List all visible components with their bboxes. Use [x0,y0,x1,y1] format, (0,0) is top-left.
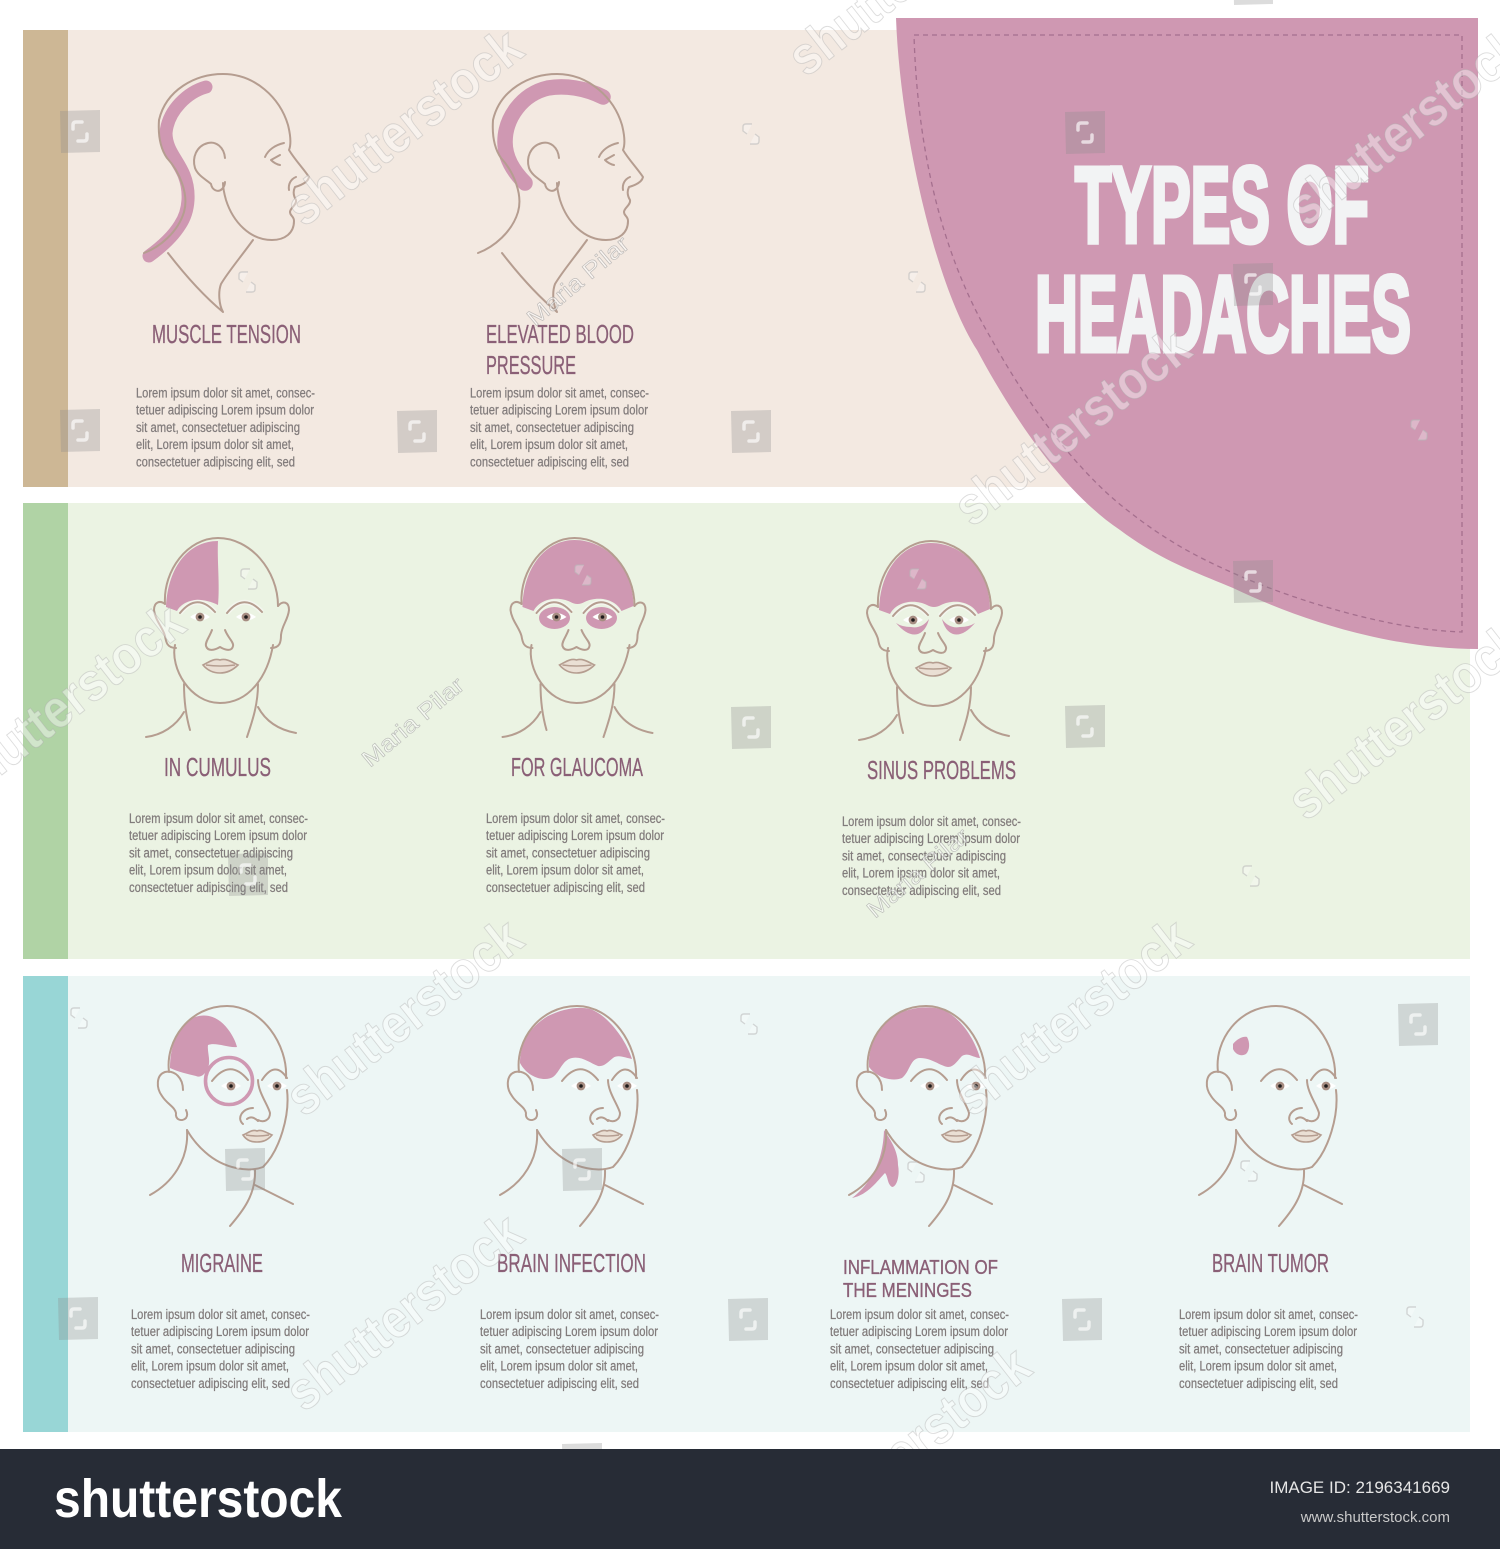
text: inflammation of the meninges description: consectetuer adipiscing elit, sed [830,1376,989,1391]
text: migraine description: tetuer adipiscing Lorem ipsum dolor [131,1324,309,1339]
label: sinus problems: SINUS PROBLEMS [867,755,1016,785]
text: brain infection description: consectetuer adipiscing elit, sed [480,1376,639,1391]
watermark overlay: shutterstock [782,1334,1042,1549]
text: brain infection description: sit amet, consectetuer adipiscing [480,1341,644,1356]
title panel: pink quarter shape with title [896,18,1478,649]
watermark overlay: Maria Pilar [522,230,634,331]
text: brain infection description: elit, Lorem ipsum dolor sit amet, [480,1359,638,1374]
text: sinus problems description: sit amet, consectetuer adipiscing [842,848,1006,863]
text: in cumulus description: sit amet, consectetuer adipiscing [129,845,293,860]
text: migraine description [131,1307,310,1391]
text: for glaucoma description [486,811,665,895]
text: muscle tension description: sit amet, consectetuer adipiscing [136,420,300,435]
image id: IMAGE ID: 2196341669 [1269,1478,1450,1497]
text: elevated blood pressure description: consectetuer adipiscing elit, sed [470,454,629,469]
watermark overlay: shutterstock [942,906,1202,1127]
text: brain tumor description: elit, Lorem ipsum dolor sit amet, [1179,1359,1337,1374]
text: muscle tension description: Lorem ipsum dolor sit amet, consec- [136,386,315,400]
text: brain infection description: Lorem ipsum dolor sit amet, consec- [480,1307,659,1322]
text: elevated blood pressure description: sit amet, consectetuer adipiscing [470,420,634,435]
panel: bottom band (migraine, infection, meninges, tumor) [23,976,1470,1432]
panel: middle band (in cumulus, glaucoma, sinus) [23,503,1470,959]
text: for glaucoma description: elit, Lorem ipsum dolor sit amet, [486,863,644,878]
text: brain tumor description: consectetuer adipiscing elit, sed [1179,1376,1338,1391]
text: brain tumor description [1179,1307,1358,1391]
icon: migraine head [150,1006,293,1226]
label: brain tumor: BRAIN TUMOR [1212,1248,1329,1278]
watermark overlay: shutterstock [274,906,534,1127]
footer bar [0,1449,1500,1549]
text: migraine description: elit, Lorem ipsum dolor sit amet, [131,1359,289,1374]
text: migraine description: consectetuer adipiscing elit, sed [131,1376,290,1391]
text: migraine description: Lorem ipsum dolor sit amet, consec- [131,1307,310,1322]
side strip: teal [23,976,68,1432]
text: sinus problems description: consectetuer adipiscing elit, sed [842,883,1001,898]
panel background: peach [23,30,1470,487]
label: brain infection: BRAIN INFECTION [497,1248,646,1278]
text: for glaucoma description: sit amet, consectetuer adipiscing [486,845,650,860]
text: brain tumor description: tetuer adipiscing Lorem ipsum dolor [1179,1324,1357,1339]
label: elevated blood pressure: PRESSURE [486,350,576,380]
text: elevated blood pressure description: tetuer adipiscing Lorem ipsum dolor [470,403,648,418]
label: elevated blood pressure: ELEVATED BLOOD [486,319,634,349]
text: sinus problems description: tetuer adipiscing Lorem ipsum dolor [842,831,1020,846]
text: muscle tension description: elit, Lorem ipsum dolor sit amet, [136,437,294,452]
footer background [0,1449,1500,1549]
text: for glaucoma description: consectetuer adipiscing elit, sed [486,880,645,895]
icon: inflammation of the meninges head [849,1006,992,1226]
website: www.shutterstock.com [1300,1509,1450,1526]
text: for glaucoma description: Lorem ipsum dolor sit amet, consec- [486,811,665,826]
text: inflammation of the meninges description: tetuer adipiscing Lorem ipsum dolor [830,1324,1008,1339]
icon: sinus head [859,541,1009,740]
side strip: tan [23,30,68,487]
panel: top band (muscle tension, elevated blood pressure) [23,30,1470,487]
text: inflammation of the meninges description: Lorem ipsum dolor sit amet, consec- [830,1307,1009,1322]
text: inflammation of the meninges description: sit amet, consectetuer adipiscing [830,1341,994,1356]
text: inflammation of the meninges description [830,1307,1009,1391]
icon: brain infection head [500,1006,643,1226]
label: inflammation of the meninges [843,1257,998,1302]
icon: muscle tension head [144,74,309,312]
icon: glaucoma head [502,538,652,737]
text: inflammation of the meninges description: elit, Lorem ipsum dolor sit amet, [830,1359,988,1374]
text: sinus problems description [842,814,1021,898]
text: for glaucoma description: tetuer adipiscing Lorem ipsum dolor [486,828,664,843]
text: elevated blood pressure description [470,386,649,469]
text: migraine description: sit amet, consectetuer adipiscing [131,1341,295,1356]
text: brain infection description: tetuer adipiscing Lorem ipsum dolor [480,1324,658,1339]
label: inflammation of the meninges: THE MENINGES [843,1280,972,1302]
icon: elevated blood pressure head [478,74,643,312]
title [1035,144,1411,374]
label: in cumulus: IN CUMULUS [164,752,271,782]
text: muscle tension description [136,386,315,469]
text: sinus problems description: elit, Lorem ipsum dolor sit amet, [842,866,1000,881]
watermark overlay: shutterstock [274,1201,534,1422]
text: muscle tension description: tetuer adipiscing Lorem ipsum dolor [136,403,314,418]
side strip: green [23,503,68,959]
watermark overlay: Maria Pilar [357,671,469,772]
text: in cumulus description: Lorem ipsum dolor sit amet, consec- [129,811,308,826]
label: elevated blood pressure [486,319,634,380]
panel background: pale green [23,503,1470,959]
text: elevated blood pressure description: elit, Lorem ipsum dolor sit amet, [470,437,628,452]
text: elevated blood pressure description: Lorem ipsum dolor sit amet, consec- [470,386,649,400]
pink quarter shape [896,18,1478,649]
text: in cumulus description [129,811,308,895]
text: in cumulus description: elit, Lorem ipsum dolor sit amet, [129,863,287,878]
label: for glaucoma: FOR GLAUCOMA [511,752,643,782]
dashed stitch border [914,35,1462,632]
watermark overlay: Maria Pilar [862,822,974,923]
text: sinus problems description: Lorem ipsum dolor sit amet, consec- [842,814,1021,829]
text: brain tumor description: Lorem ipsum dolor sit amet, consec- [1179,1307,1358,1322]
label: migraine: MIGRAINE [181,1248,263,1278]
text: brain infection description [480,1307,659,1391]
text: brain tumor description: sit amet, consectetuer adipiscing [1179,1341,1343,1356]
label: inflammation of the meninges: INFLAMMATION OF [843,1257,998,1279]
text: in cumulus description: tetuer adipiscing Lorem ipsum dolor [129,828,307,843]
label: muscle tension: MUSCLE TENSION [152,319,301,349]
logo: shutterstock: shutterstock [54,1469,343,1529]
text: muscle tension description: consectetuer adipiscing elit, sed [136,454,295,469]
watermark overlay: shutterstock [942,316,1202,537]
icon: in cumulus head [146,538,296,737]
panel background: pale blue [23,976,1470,1432]
icon: brain tumor head [1199,1006,1342,1226]
text: in cumulus description: consectetuer adipiscing elit, sed [129,880,288,895]
